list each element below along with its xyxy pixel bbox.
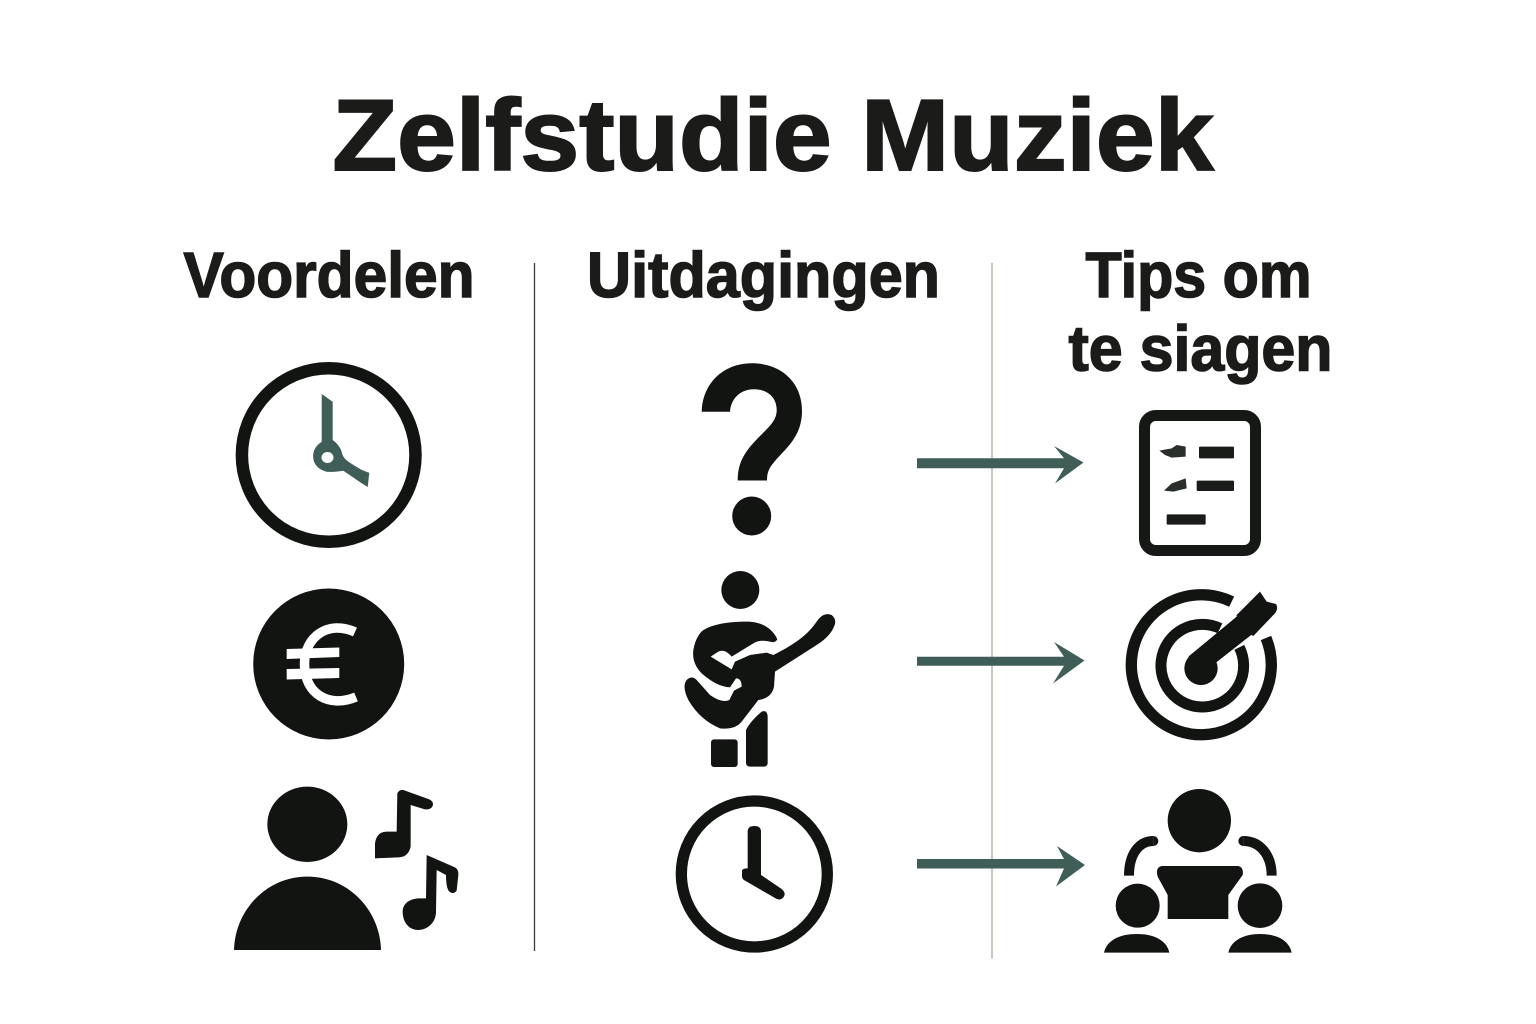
heading: Uitdagingen: Uitdagingen (587, 239, 940, 311)
heading: Tips om te slagen: te siagen (1068, 312, 1332, 384)
arrow: bottom (917, 846, 1085, 886)
icon: group of people (1104, 789, 1292, 953)
icon: clock with green hands (242, 368, 416, 542)
icon: clock (681, 801, 827, 947)
icon: question mark (702, 363, 802, 536)
icon: guitarist (685, 571, 835, 767)
icon: euro coin (253, 588, 404, 740)
title: Zelfstudie Muziek (332, 80, 1214, 192)
heading: Tips om te slagen (1068, 239, 1332, 384)
icon: checklist (1144, 415, 1255, 550)
arrow: middle (917, 642, 1084, 684)
heading: Tips om te slagen: Tips om (1086, 239, 1312, 311)
heading: Voordelen: Voordelen (184, 239, 474, 311)
icon: target with arrow (1131, 592, 1277, 735)
icon: person with music notes (234, 787, 458, 950)
arrow: top (917, 446, 1084, 484)
